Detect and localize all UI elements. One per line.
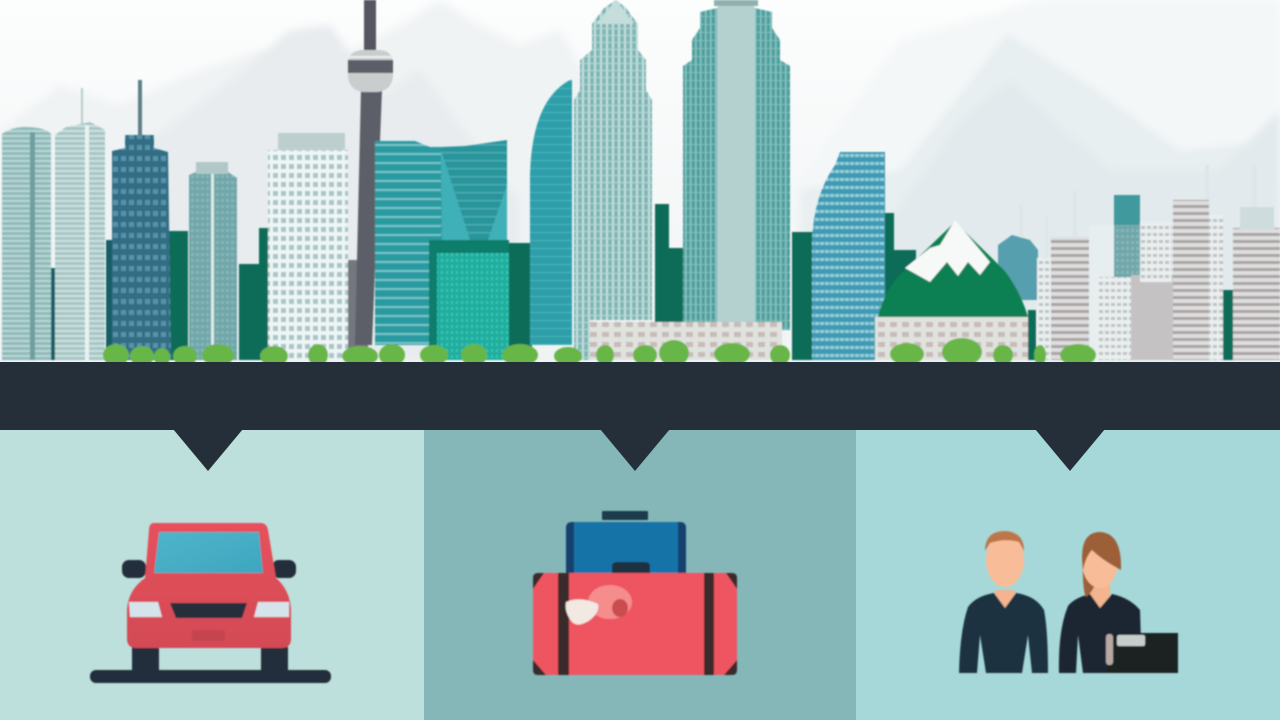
crowned tower (574, 0, 652, 360)
panel: car (0, 430, 424, 720)
woman (1059, 532, 1142, 673)
curved blue building (812, 152, 886, 360)
CN tower (348, 0, 393, 360)
dark green backing blocks (50, 204, 1237, 360)
pointer: luggage (600, 429, 670, 471)
background mountains (0, 0, 1280, 360)
building 2 (55, 122, 105, 360)
panel: people (856, 430, 1280, 720)
sky background (0, 0, 1280, 365)
man (959, 531, 1048, 673)
white grid building (268, 150, 348, 360)
podium (590, 322, 782, 360)
skyline (2, 0, 1280, 366)
bright teal building (429, 240, 509, 360)
icon: luggage (533, 511, 737, 675)
dark blue building (112, 135, 171, 360)
dark band (0, 362, 1280, 430)
pointer: car (173, 429, 243, 471)
distant teal building (998, 235, 1038, 300)
building 1 (2, 127, 51, 360)
twin-wing tower (683, 0, 790, 330)
building 4 (189, 162, 237, 360)
panel: luggage (424, 430, 856, 720)
pointer: people (1035, 429, 1105, 471)
distant spires (1019, 165, 1257, 260)
right grey buildings (1037, 195, 1280, 360)
mountain dome (875, 220, 1028, 360)
icon: car (90, 523, 331, 683)
curved teal building (530, 80, 572, 345)
icon: people (959, 531, 1178, 673)
teal twin building (375, 140, 507, 345)
briefcase (1106, 633, 1178, 673)
green shrubs (103, 338, 1096, 366)
